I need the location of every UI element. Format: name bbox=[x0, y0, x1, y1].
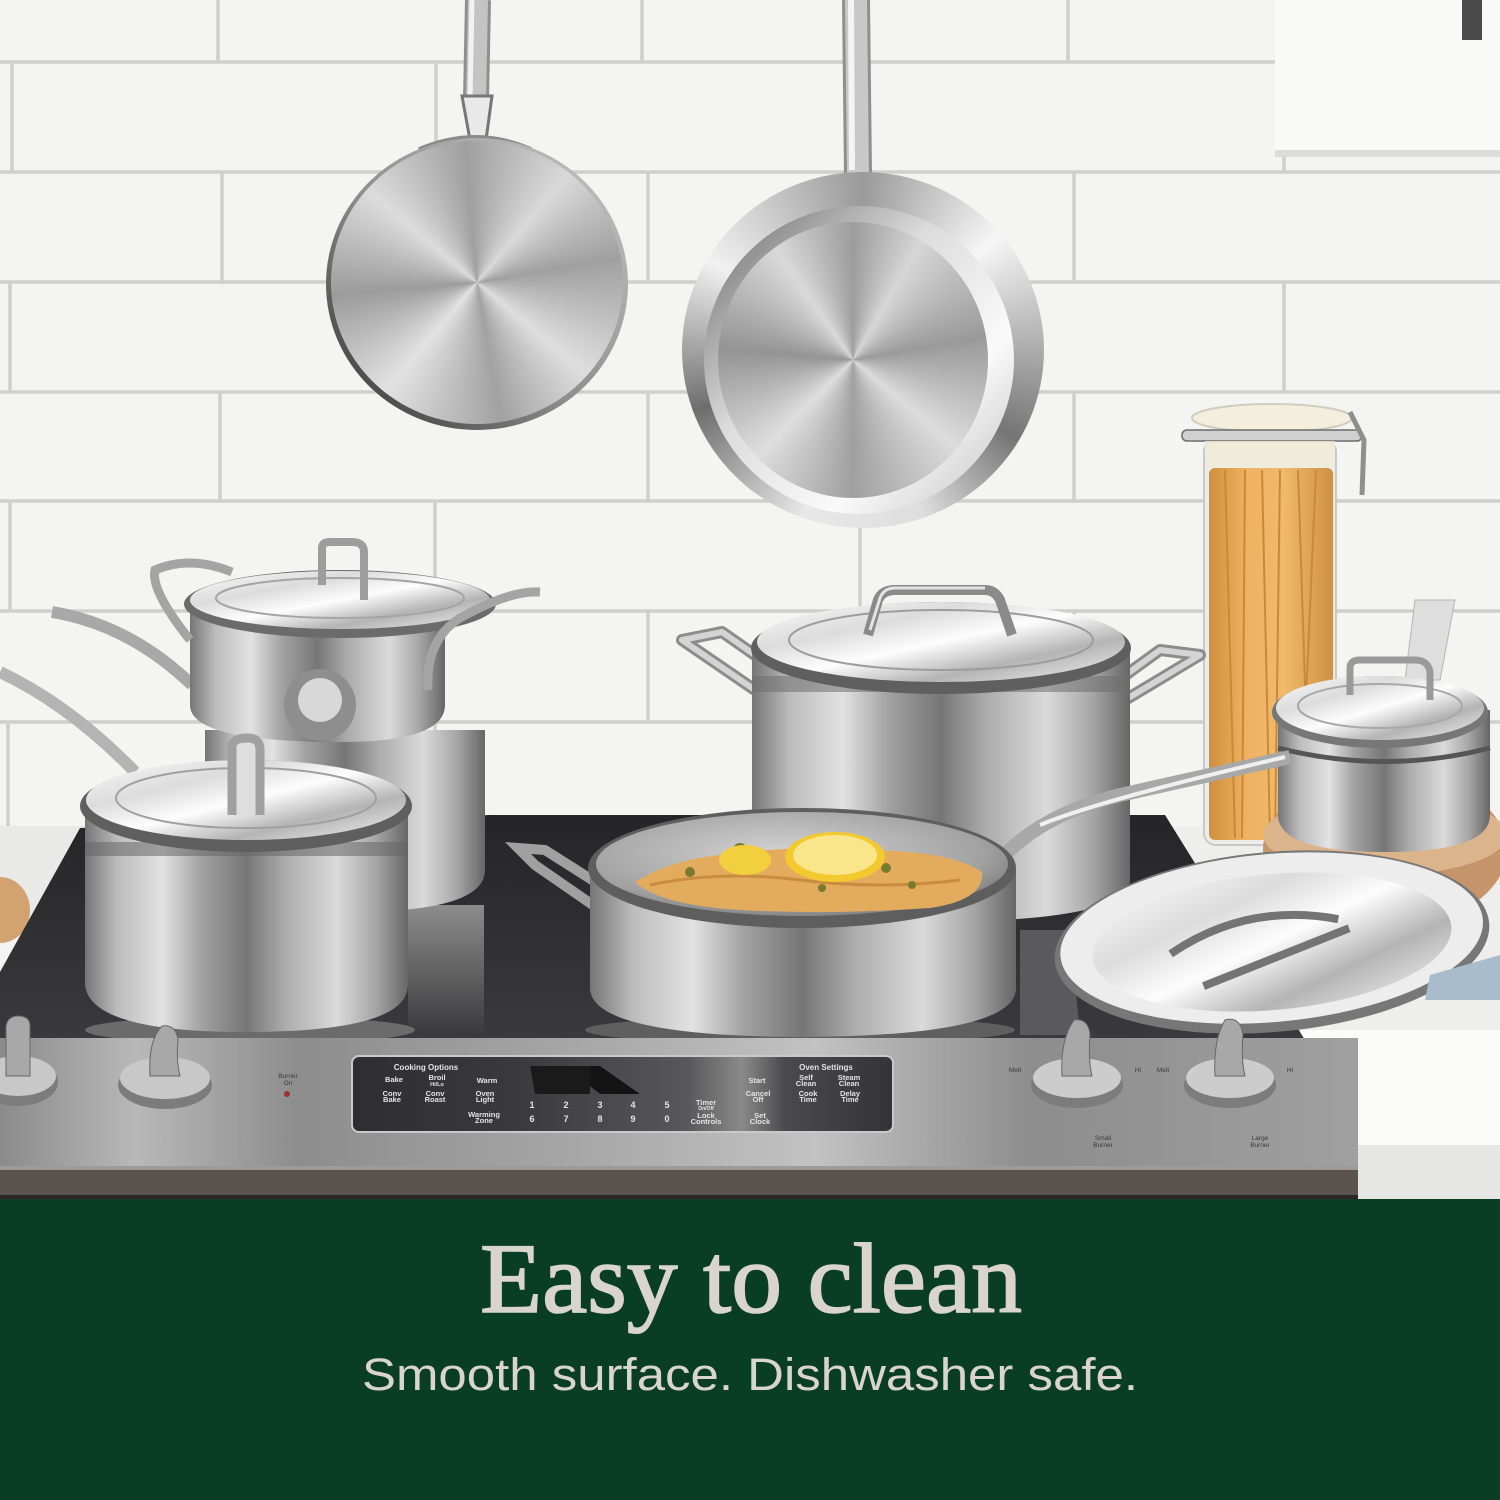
control labels: 3 bbox=[597, 1100, 603, 1110]
title: Easy to clean bbox=[480, 1223, 1022, 1334]
stock pot side handles bbox=[682, 632, 1200, 700]
control labels: 2 bbox=[563, 1100, 569, 1110]
control labels: 9 bbox=[630, 1114, 636, 1124]
control labels: Self bbox=[799, 1073, 813, 1082]
food in saute pan bbox=[635, 832, 982, 912]
pan interior small bbox=[331, 141, 623, 424]
burner labels: Large bbox=[1252, 1135, 1269, 1142]
burner indicator: Burner bbox=[278, 1073, 299, 1080]
saute pan bbox=[518, 757, 1290, 1037]
small saucepan right with lid bbox=[1272, 600, 1490, 852]
black glass cooktop bbox=[0, 815, 1305, 1040]
capers bbox=[685, 843, 916, 892]
pan step ring bbox=[704, 206, 1014, 514]
knob 2 bbox=[118, 1026, 212, 1109]
control labels: 7 bbox=[563, 1114, 569, 1124]
control labels: Zone bbox=[475, 1116, 493, 1125]
control labels: Light bbox=[476, 1095, 495, 1104]
pan interior large bbox=[718, 222, 988, 498]
control labels: Roast bbox=[425, 1095, 446, 1104]
green caption band bbox=[0, 1199, 1500, 1500]
steamer side handles bbox=[154, 563, 540, 690]
control labels: On/Off bbox=[698, 1106, 714, 1112]
control labels: Cooking Options bbox=[394, 1063, 459, 1072]
knob 1 bbox=[0, 1016, 58, 1106]
jar lid and clamp bbox=[1182, 404, 1364, 495]
steamer pot upper bbox=[154, 542, 540, 742]
control labels: Steam bbox=[838, 1073, 861, 1082]
lower range band bbox=[0, 1168, 1358, 1199]
burner labels: Burner bbox=[1250, 1142, 1271, 1149]
cooktop reflections bbox=[85, 905, 1080, 1044]
spaghetti bbox=[1209, 468, 1333, 840]
burner indicator bbox=[278, 1073, 299, 1097]
control labels: 5 bbox=[664, 1100, 670, 1110]
subtitle: Smooth surface. Dishwasher safe. bbox=[362, 1349, 1138, 1400]
control labels: Clean bbox=[796, 1079, 817, 1088]
burner labels: Small bbox=[1095, 1135, 1112, 1142]
control labels: Lock bbox=[697, 1111, 716, 1120]
long handle back bbox=[52, 612, 192, 685]
knob 3 bbox=[1031, 1020, 1123, 1108]
burner labels bbox=[1009, 1067, 1293, 1149]
control knobs bbox=[0, 1016, 1276, 1109]
control labels: Oven Settings bbox=[799, 1063, 853, 1072]
wooden board bbox=[1263, 772, 1500, 928]
control labels: Time bbox=[799, 1095, 817, 1104]
burner labels: Burner bbox=[1093, 1142, 1114, 1149]
control labels: Warm bbox=[477, 1076, 498, 1085]
burner labels: Melt bbox=[1009, 1067, 1021, 1074]
control labels: Set bbox=[754, 1111, 766, 1120]
wall cabinet bbox=[1275, 0, 1500, 157]
control labels: 0 bbox=[664, 1114, 670, 1124]
lid resting on range bbox=[1047, 833, 1497, 1051]
control labels: Hi/Lo bbox=[430, 1082, 445, 1088]
range control panel bbox=[0, 1016, 1358, 1199]
control labels: Oven bbox=[476, 1089, 495, 1098]
control labels: Broil bbox=[428, 1073, 446, 1082]
spaghetti jar bbox=[1182, 404, 1364, 845]
towel bbox=[1425, 955, 1500, 1000]
lemon slices bbox=[719, 832, 885, 882]
control labels: Off bbox=[753, 1095, 764, 1104]
control labels: Start bbox=[748, 1076, 766, 1085]
hanging frying pan small bbox=[326, 138, 628, 430]
control labels: Time bbox=[841, 1095, 859, 1104]
saute pan long handle bbox=[1000, 757, 1290, 860]
burner indicator: On bbox=[284, 1080, 293, 1087]
stock pot lid handle bbox=[868, 590, 1012, 635]
countertop bbox=[0, 826, 1500, 1200]
steamer lid knob bbox=[322, 542, 364, 600]
left saucepan bbox=[80, 738, 412, 1032]
burner labels: Melt bbox=[1157, 1067, 1169, 1074]
stacked pot lower bbox=[205, 730, 485, 912]
control labels: Bake bbox=[385, 1075, 403, 1084]
knob 4 bbox=[1184, 1019, 1276, 1108]
hanging frying pan large bbox=[682, 172, 1044, 528]
control labels: 4 bbox=[630, 1100, 636, 1110]
wooden spoon bbox=[0, 877, 30, 943]
control labels: Warming bbox=[468, 1110, 500, 1119]
control labels: Conv bbox=[426, 1089, 445, 1098]
control labels: 8 bbox=[597, 1114, 603, 1124]
control labels: Controls bbox=[691, 1117, 721, 1126]
control labels: Cook bbox=[799, 1089, 818, 1098]
control labels: Bake bbox=[383, 1095, 401, 1104]
control labels: 6 bbox=[529, 1114, 535, 1124]
saucepan lid knob bbox=[232, 738, 260, 815]
control labels: Clock bbox=[750, 1117, 771, 1126]
control labels: 1 bbox=[529, 1100, 535, 1110]
tile wall background bbox=[0, 0, 1500, 830]
control labels: Timer bbox=[696, 1098, 716, 1107]
control labels: Conv bbox=[383, 1089, 402, 1098]
control labels: Cancel bbox=[746, 1089, 770, 1098]
control labels: Clean bbox=[839, 1079, 860, 1088]
left saucepan handle bbox=[0, 672, 135, 772]
stock pot bbox=[682, 588, 1200, 922]
lid handle bbox=[1168, 909, 1353, 989]
burner labels: Hi bbox=[1287, 1067, 1293, 1074]
control display bbox=[352, 1056, 893, 1132]
burner labels: Hi bbox=[1135, 1067, 1141, 1074]
saute pan helper handle bbox=[518, 848, 600, 910]
pan handles hanging bbox=[420, 0, 858, 175]
control labels bbox=[383, 1063, 861, 1126]
control labels: Delay bbox=[840, 1089, 861, 1098]
